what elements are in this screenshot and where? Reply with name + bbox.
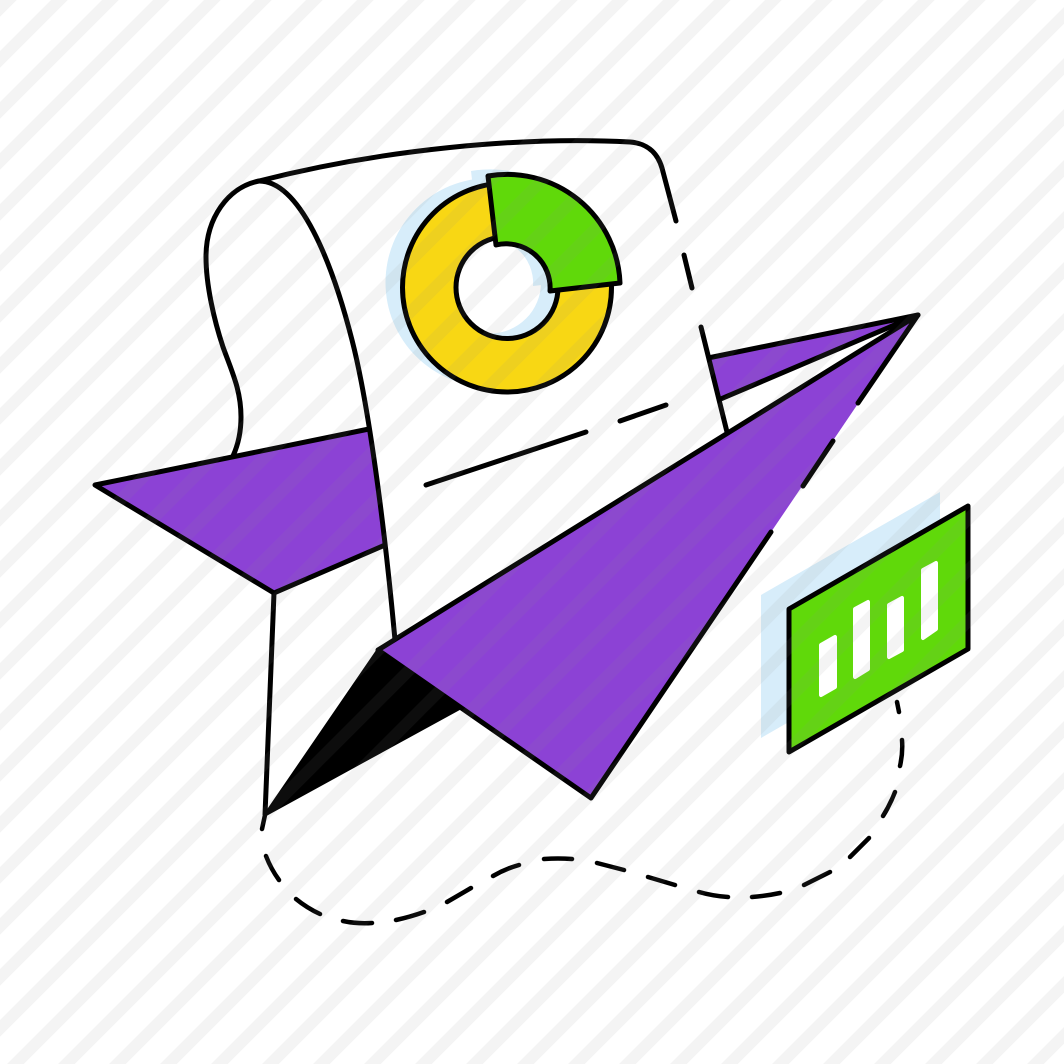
bars <box>821 563 936 695</box>
left edge <box>259 181 395 640</box>
yellow ring segment <box>402 183 612 392</box>
chart card shadow <box>761 492 940 738</box>
paper plane: main purple wing <box>378 315 918 798</box>
green ring segment <box>488 174 620 291</box>
chart card <box>789 506 968 752</box>
paper plane: white fold lines <box>265 593 274 815</box>
paper plane: rear right wing <box>708 315 918 401</box>
donut shadow <box>385 169 603 387</box>
dashed right edge <box>684 255 727 432</box>
card background <box>789 506 968 752</box>
bar 4 <box>923 563 936 638</box>
donut chart <box>385 169 620 392</box>
paper plane: left wing <box>95 429 385 593</box>
top edge and corner <box>259 141 676 221</box>
dashed flight path <box>262 702 902 923</box>
curl line of the paper <box>206 181 259 456</box>
paper plane: black under-fold <box>265 650 462 815</box>
bar 3 <box>889 598 902 657</box>
paper sheet <box>259 141 727 640</box>
bar 2 <box>855 602 868 677</box>
dashed bottom edge <box>426 405 666 485</box>
paper plane: wing outline with dashes <box>378 315 918 798</box>
paper sheet outline <box>259 141 727 640</box>
bar 1 <box>821 637 835 695</box>
